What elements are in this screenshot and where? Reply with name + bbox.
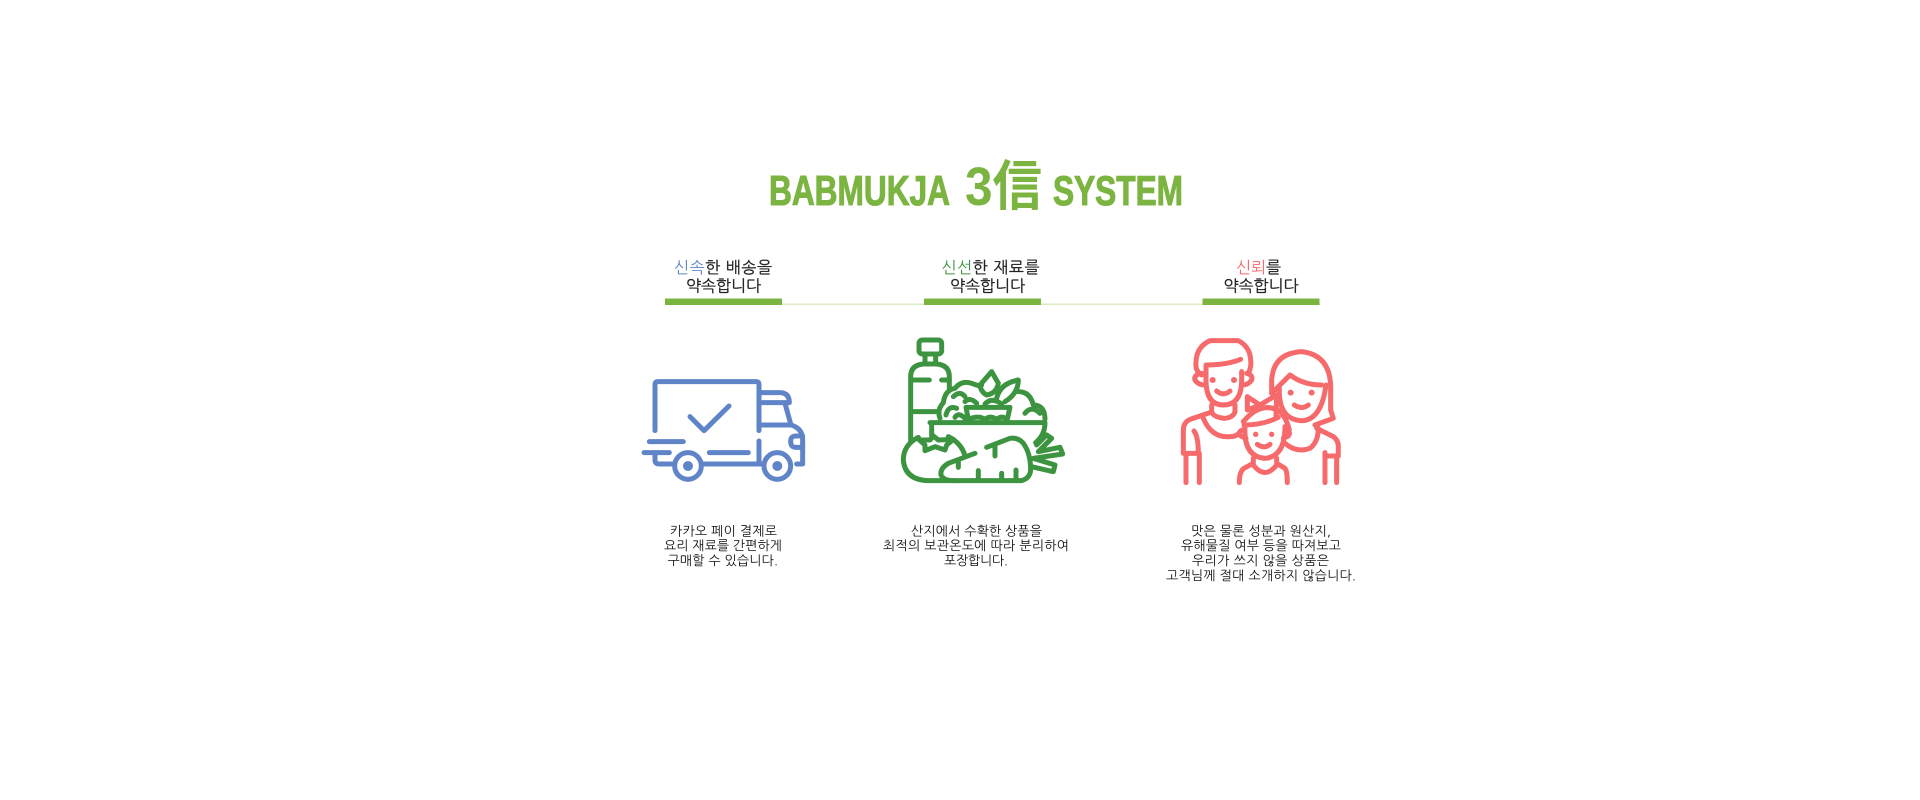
title: 3信: [965, 157, 1042, 217]
panel: trust: [1166, 259, 1356, 582]
heading: fresh ingredients: 약속합니다: [950, 278, 1025, 294]
panel: fresh ingredients: [883, 259, 1069, 567]
text: trust: 우리가 쓰지 않을 상품은: [1192, 554, 1329, 567]
text: speedy delivery: 카카오 페이 결제로: [670, 524, 777, 538]
text: speedy delivery: [664, 524, 782, 567]
heading: fresh ingredients: 신선한 재료를: [942, 259, 1040, 276]
text: fresh ingredients: [883, 524, 1069, 567]
title: BABMUKJA: [769, 167, 950, 214]
heading: trust: 신뢰를: [1236, 259, 1281, 276]
text: trust: 고객님께 절대 소개하지 않습니다.: [1166, 569, 1356, 582]
text: fresh ingredients: 최적의 보관온도에 따라 분리하여: [883, 539, 1069, 552]
heading: speedy delivery: 약속합니다: [686, 278, 761, 294]
icon: groceries: [903, 340, 1063, 481]
heading: trust: [1224, 259, 1298, 294]
icon: family: [1183, 341, 1338, 483]
text: trust: 유해물질 여부 등을 따져보고: [1181, 539, 1341, 552]
text: trust: [1166, 524, 1356, 582]
accent bar: [924, 298, 1041, 305]
icon: delivery truck: [644, 382, 803, 479]
accent bar: [1202, 298, 1320, 305]
heading: speedy delivery: [674, 259, 772, 294]
title: [769, 157, 1183, 217]
text: fresh ingredients: 산지에서 수확한 상품을: [911, 524, 1042, 538]
panel: speedy delivery: [644, 259, 803, 567]
text: fresh ingredients: 포장합니다.: [944, 554, 1008, 567]
connector line: [665, 304, 1320, 305]
heading: speedy delivery: 신속한 배송을: [674, 259, 772, 276]
text: speedy delivery: 요리 재료를 간편하게: [664, 539, 782, 552]
heading: fresh ingredients: [942, 259, 1040, 294]
accent bar: [665, 298, 782, 305]
title: SYSTEM: [1053, 167, 1183, 214]
text: speedy delivery: 구매할 수 있습니다.: [668, 554, 778, 567]
text: trust: 맛은 물론 성분과 원산지,: [1191, 524, 1331, 538]
heading: trust: 약속합니다: [1224, 278, 1298, 294]
